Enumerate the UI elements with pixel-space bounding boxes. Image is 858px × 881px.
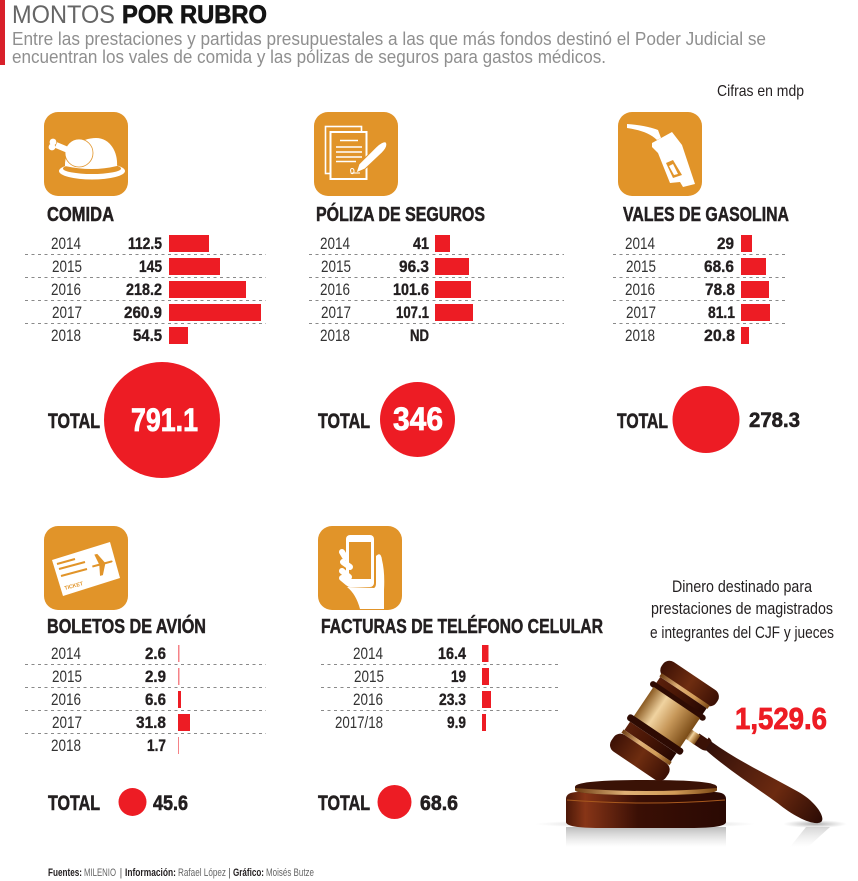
table: facturas de telefono celular	[321, 644, 561, 732]
table: poliza de seguros: 2016	[320, 280, 350, 299]
table: comida: 2015	[52, 257, 82, 276]
heading: facturas de telefono celular: FACTURAS DE TELÉFONO CELULAR	[321, 615, 603, 638]
table: boletos de avion: 31.8	[136, 713, 166, 732]
table: facturas de telefono celular: 2016	[353, 690, 383, 709]
table: comida: 218.2	[126, 280, 162, 299]
total: poliza de seguros: 346	[393, 401, 443, 437]
table: facturas de telefono celular: 2017/18	[335, 713, 383, 732]
table: poliza de seguros: 107.1	[396, 303, 429, 322]
icon: hand holding phone	[318, 526, 402, 610]
table: vales de gasolina: 2017	[626, 303, 656, 322]
red accent bar	[0, 0, 5, 65]
credits: Rafael López	[178, 867, 226, 879]
units note: Cifras en mdp	[717, 83, 804, 100]
panel: boletos de avion	[25, 526, 266, 816]
table: boletos de avion: 2016	[51, 690, 81, 709]
table: vales de gasolina: 2015	[626, 257, 656, 276]
total: vales de gasolina	[617, 386, 800, 453]
icon: gavel and sound block	[535, 658, 849, 870]
title	[12, 1, 267, 29]
table: vales de gasolina: 29	[717, 234, 734, 253]
table: vales de gasolina: 2016	[625, 280, 655, 299]
table: poliza de seguros	[309, 234, 564, 345]
total: boletos de avion: 45.6	[153, 792, 188, 815]
intro text: Entre las prestaciones y partidas presupuestales a las que más fondos destinó el Poder Judicial se	[12, 29, 766, 49]
table: poliza de seguros: 2017	[321, 303, 351, 322]
table: vales de gasolina	[613, 234, 786, 345]
credits: Fuentes:	[48, 867, 82, 879]
heading: comida: COMIDA	[47, 204, 114, 226]
panel: comida	[25, 112, 266, 478]
table: boletos de avion: 1.7	[147, 736, 166, 755]
total: vales de gasolina: TOTAL	[617, 410, 668, 433]
table: facturas de telefono celular: 2014	[353, 644, 383, 663]
table: poliza de seguros: 101.6	[393, 280, 429, 299]
table: poliza de seguros: ND	[410, 326, 429, 345]
credits	[48, 867, 314, 879]
heading: vales de gasolina: VALES DE GASOLINA	[623, 204, 789, 226]
table: facturas de telefono celular: 23.3	[439, 690, 466, 709]
credits: MILENIO	[84, 867, 116, 879]
callout: magistrates and judges: Dinero destinado para	[672, 577, 812, 596]
icon: plane ticket: TICKET	[64, 581, 84, 592]
panel: facturas de telefono celular	[318, 526, 603, 819]
table: comida: 260.9	[124, 303, 162, 322]
table: vales de gasolina: 78.8	[705, 280, 735, 299]
icon: fuel nozzle	[618, 112, 702, 196]
total: boletos de avion: TOTAL	[48, 792, 100, 815]
total: facturas de telefono celular: 68.6	[420, 792, 458, 815]
table: boletos de avion: 2018	[51, 736, 81, 755]
total: poliza de seguros: TOTAL	[318, 410, 370, 433]
table: comida: 112.5	[128, 234, 162, 253]
table: poliza de seguros: 2018	[320, 326, 350, 345]
credits: |	[120, 867, 122, 879]
credits: Información:	[125, 867, 176, 879]
intro text: encuentran los vales de comida y las pólizas de seguros para gastos médicos.	[12, 47, 606, 67]
total: facturas de telefono celular	[318, 785, 458, 819]
table: boletos de avion: 6.6	[145, 690, 166, 709]
panel: poliza de seguros	[309, 112, 564, 457]
table: poliza de seguros: 96.3	[399, 257, 429, 276]
table: facturas de telefono celular: 16.4	[438, 644, 466, 663]
table: comida: 145	[139, 257, 162, 276]
panel: vales de gasolina	[613, 112, 800, 453]
heading: poliza de seguros: PÓLIZA DE SEGUROS	[316, 202, 485, 226]
total: comida	[48, 362, 220, 478]
table: poliza de seguros: 41	[413, 234, 429, 253]
table: vales de gasolina: 81.1	[708, 303, 735, 322]
credits: |	[228, 867, 231, 879]
table: poliza de seguros: 2014	[320, 234, 350, 253]
table: comida: 2014	[51, 234, 81, 253]
table: boletos de avion: 2.6	[145, 644, 166, 663]
table: boletos de avion: 2014	[51, 644, 81, 663]
table: comida: 54.5	[133, 326, 162, 345]
table: vales de gasolina: 2018	[625, 326, 655, 345]
intro text	[12, 29, 766, 67]
table: comida: 2017	[52, 303, 82, 322]
table: vales de gasolina: 20.8	[704, 326, 735, 345]
heading: boletos de avion: BOLETOS DE AVIÓN	[47, 614, 206, 638]
callout: magistrates and judges	[650, 577, 834, 642]
table: boletos de avion	[25, 644, 266, 755]
icon: roast chicken	[44, 112, 128, 196]
table: facturas de telefono celular: 2015	[354, 667, 384, 686]
total figure: 1,529.6	[735, 701, 827, 736]
table: facturas de telefono celular: 19	[451, 667, 466, 686]
credits: Gráfico:	[233, 867, 264, 879]
table: boletos de avion: 2017	[52, 713, 82, 732]
total: facturas de telefono celular: TOTAL	[318, 792, 370, 815]
icon: plane ticket	[44, 526, 128, 610]
total: boletos de avion	[48, 788, 188, 816]
table: poliza de seguros: 2015	[321, 257, 351, 276]
title: POR RUBRO	[122, 1, 267, 29]
table: vales de gasolina: 68.6	[704, 257, 734, 276]
title: MONTOS	[12, 1, 115, 29]
total: poliza de seguros	[318, 382, 455, 457]
table: comida	[25, 234, 266, 345]
table: comida: 2016	[51, 280, 81, 299]
table: comida: 2018	[51, 326, 81, 345]
table: boletos de avion: 2015	[52, 667, 82, 686]
table: boletos de avion: 2.9	[145, 667, 166, 686]
icon: documents and pen	[314, 112, 398, 196]
total: comida: TOTAL	[48, 410, 100, 433]
credits: Moisés Butze	[266, 867, 314, 879]
total: comida: 791.1	[131, 402, 198, 438]
total: vales de gasolina: 278.3	[749, 409, 800, 432]
table: facturas de telefono celular: 9.9	[447, 713, 466, 732]
table: vales de gasolina: 2014	[625, 234, 655, 253]
